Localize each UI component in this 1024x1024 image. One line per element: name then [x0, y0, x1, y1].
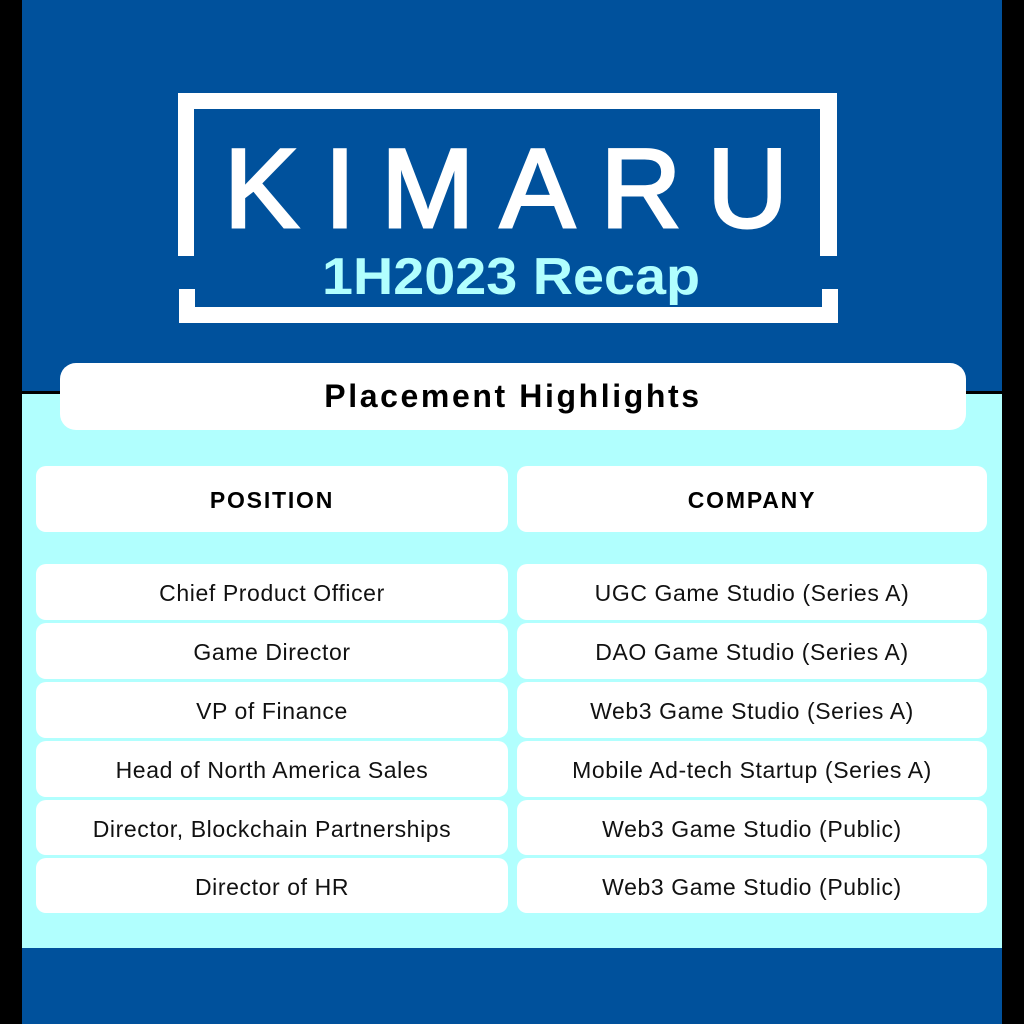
row 2: Game Director — [193, 639, 351, 665]
header: company — [517, 466, 987, 532]
table: Web3 Game Studio (Series A) — [590, 698, 914, 724]
row 2 — [36, 623, 508, 679]
row 5: Director, Blockchain Partnerships — [93, 816, 451, 842]
table: Web3 Game Studio (Public) — [602, 874, 902, 900]
row 3: VP of Finance — [196, 698, 348, 724]
table: DAO Game Studio (Series A) — [595, 639, 909, 665]
table: Web3 Game Studio (Public) — [602, 816, 902, 842]
header: position: POSITION — [210, 487, 334, 513]
bottom blue band — [22, 948, 1002, 1024]
frame bottom bracket — [179, 289, 838, 323]
table: Mobile Ad-tech Startup (Series A) — [572, 757, 932, 783]
logo text KIMARU: KIMARU — [224, 126, 788, 251]
heading: Placement Highlights: Placement Highlights — [324, 378, 702, 414]
row 4: Head of North America Sales — [116, 757, 428, 783]
subtitle: 1H2023 Recap — [322, 248, 700, 306]
heading: Placement Highlights — [60, 363, 966, 430]
header: company: COMPANY — [688, 487, 816, 513]
row 6: Director of HR — [195, 874, 349, 900]
logo frame and title — [178, 93, 838, 323]
row 1: Chief Product Officer — [159, 580, 385, 606]
table: UGC Game Studio (Series A) — [595, 580, 909, 606]
row 5 — [36, 800, 508, 855]
row 1 — [36, 564, 508, 620]
top blue band — [22, 0, 1002, 391]
cyan content panel — [22, 394, 1002, 948]
frame top bracket — [178, 93, 837, 256]
row 6 — [36, 858, 508, 913]
header: position — [36, 466, 508, 532]
row 4 — [36, 741, 508, 797]
table — [36, 466, 987, 913]
row 3 — [36, 682, 508, 738]
